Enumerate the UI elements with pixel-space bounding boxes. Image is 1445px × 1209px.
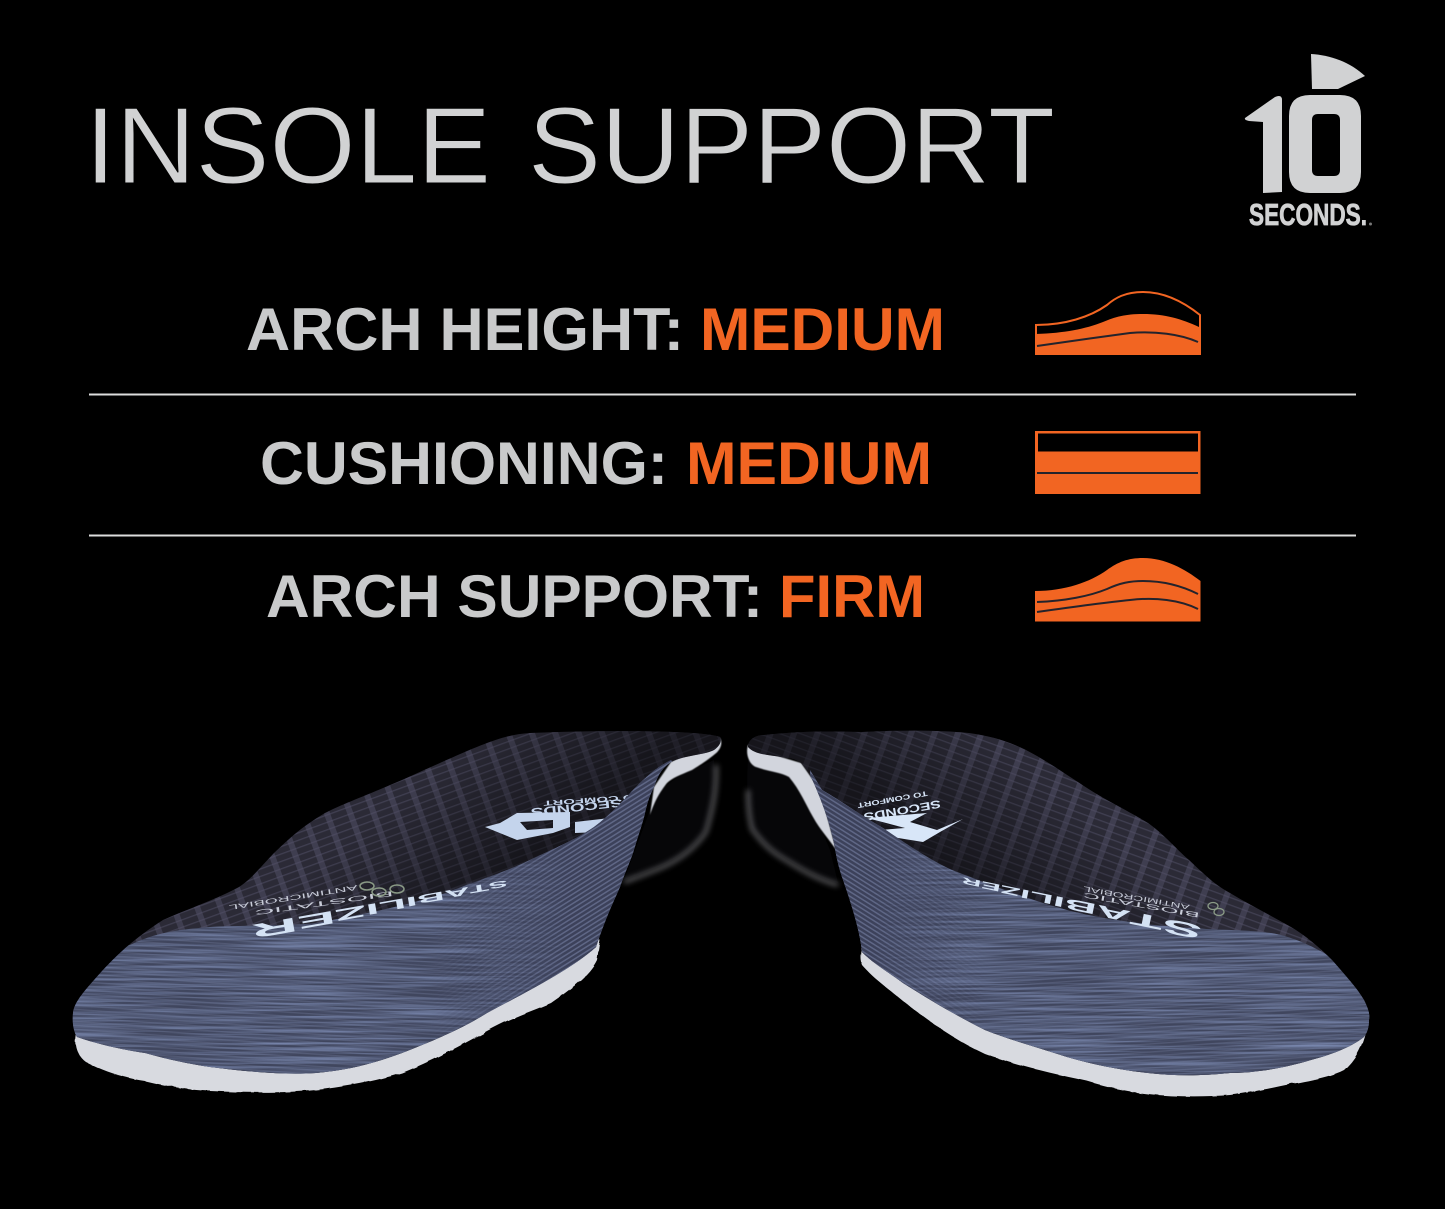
title: INSOLE bbox=[85, 85, 491, 207]
icon: arch support firm bbox=[1035, 558, 1200, 622]
heel shell bbox=[624, 760, 716, 882]
row: arch support: ARCH SUPPORT: bbox=[266, 563, 763, 630]
row: cushioning bbox=[260, 430, 932, 497]
row: cushioning: MEDIUM bbox=[686, 430, 932, 497]
10 logo print: TO COMFORT bbox=[856, 789, 928, 808]
top surface bbox=[72, 731, 721, 1074]
antimicrobial print: BIOSTATIC bbox=[1083, 891, 1200, 918]
stabilizer print: STABILIZER bbox=[250, 875, 510, 943]
10 logo print: SECONDS bbox=[530, 796, 623, 818]
10 logo print bbox=[485, 795, 628, 840]
diagonal flap bbox=[810, 770, 976, 1020]
foam edge bbox=[860, 945, 1366, 1096]
heel foam bbox=[650, 738, 721, 815]
row: cushioning: CUSHIONING: bbox=[260, 430, 668, 497]
antimicrobial print: ANTIMICROBIAL bbox=[228, 883, 358, 910]
antimicrobial print: ANTIMICROBIAL bbox=[1083, 884, 1190, 910]
antimicrobial print bbox=[1083, 884, 1200, 918]
heel foam bbox=[747, 745, 836, 850]
light forefoot bbox=[810, 770, 1370, 1076]
hexagon mark bbox=[360, 882, 404, 896]
forefoot streaks bbox=[72, 766, 666, 1074]
row: arch height: MEDIUM bbox=[700, 296, 945, 363]
title bbox=[85, 85, 1055, 207]
icon: cushioning medium bbox=[1035, 431, 1200, 494]
stabilizer print: STABILIZER bbox=[958, 873, 1204, 943]
row: arch height bbox=[246, 296, 945, 363]
icon: arch height medium bbox=[1036, 292, 1200, 354]
row: arch height: ARCH HEIGHT: bbox=[246, 296, 684, 363]
title: SUPPORT bbox=[528, 85, 1055, 207]
light forefoot bbox=[72, 760, 672, 1074]
diagonal flap bbox=[446, 760, 672, 1025]
top surface bbox=[748, 730, 1370, 1076]
divider bbox=[89, 394, 1356, 396]
row: arch support: FIRM bbox=[779, 563, 925, 630]
left insole bbox=[60, 720, 740, 1100]
logo: 10 Seconds: SECONDS. bbox=[1249, 197, 1367, 232]
hexagon mark bbox=[1208, 902, 1224, 916]
10 logo print bbox=[856, 789, 963, 842]
forefoot streaks bbox=[810, 775, 1370, 1074]
heel shell bbox=[747, 760, 838, 885]
right insole bbox=[740, 720, 1400, 1100]
antimicrobial print: BIOSTATIC bbox=[254, 889, 394, 915]
foam edge bbox=[75, 940, 600, 1092]
10 logo print: TO COMFORT bbox=[542, 792, 643, 806]
10 logo print: SECONDS bbox=[863, 797, 942, 822]
divider bbox=[89, 534, 1356, 536]
logo: 10 Seconds bbox=[1245, 54, 1372, 232]
antimicrobial print bbox=[229, 885, 392, 914]
